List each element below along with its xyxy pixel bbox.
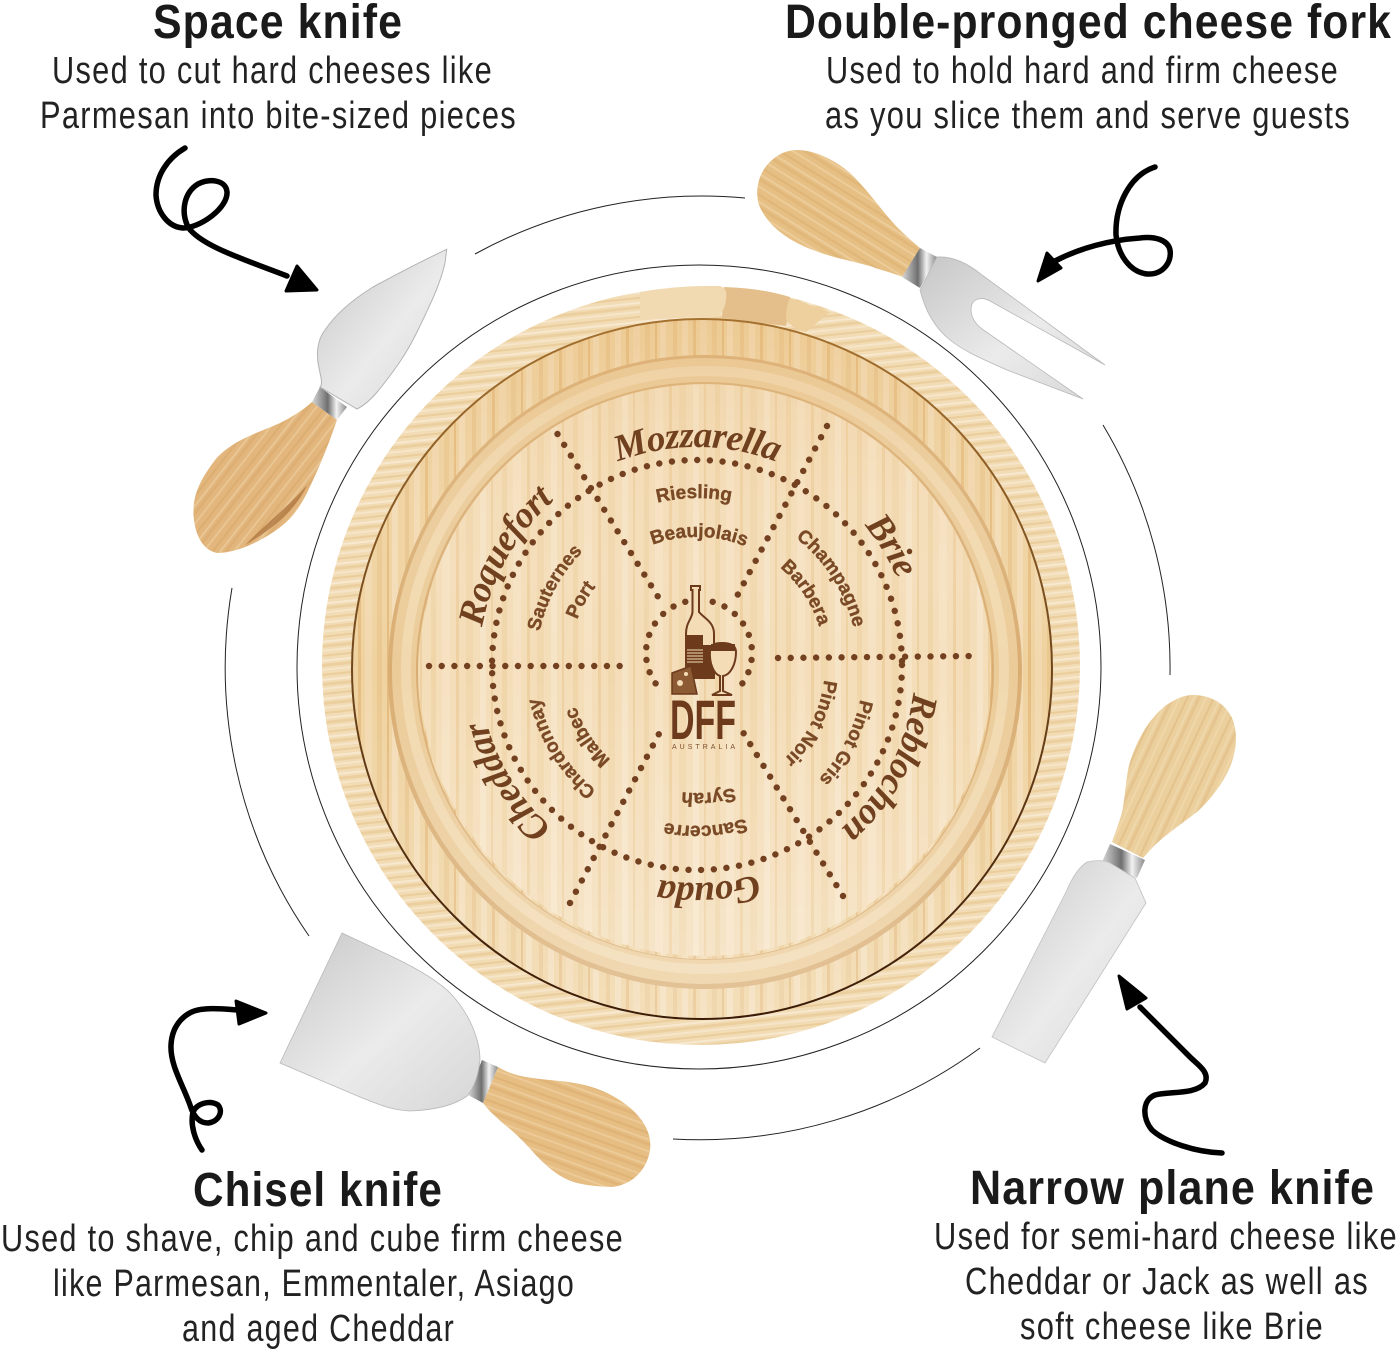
cheese names: Gouda [656, 876, 759, 908]
wine names: Sauternes [528, 546, 581, 630]
cheese names: Brie [864, 514, 912, 576]
arrow: to narrow plane knife [1119, 976, 1222, 1153]
dotted segment lines [429, 426, 972, 903]
arrow: to space knife [156, 148, 317, 291]
arrow: to chisel knife [171, 1001, 266, 1150]
arrow: to cheese fork [1038, 167, 1170, 281]
wine names: Port [565, 580, 596, 619]
wine names: Beaujolais [650, 523, 748, 546]
icon: space knife [193, 249, 447, 553]
icon: wine bottle [686, 586, 714, 678]
title: Chisel knife: Used to shave, chip and cube firm cheese [1, 1218, 624, 1260]
logo: DFF Australia [670, 586, 736, 751]
wine names: Pinot Noir [786, 680, 838, 766]
wine names: Sancerre [664, 820, 748, 836]
juice groove [403, 370, 1007, 974]
wine names: Syrah [682, 786, 736, 807]
title: Chisel knife [1, 1164, 624, 1350]
wine names: Chardonnay [529, 700, 594, 798]
icon: wine glass [710, 643, 736, 695]
DFF wordmark: DFF [670, 688, 736, 751]
wine names [528, 484, 874, 836]
icon: cheese fork [757, 150, 1105, 399]
outer circle arcs [225, 196, 1170, 1140]
icon: narrow plane knife [992, 695, 1236, 1063]
cheese names: Reblochon [842, 692, 937, 840]
panel: bamboo cheese board [322, 286, 1080, 1045]
cheese names [459, 427, 937, 908]
cheese names: Mozzarella [614, 427, 782, 462]
board rim [322, 287, 1080, 1045]
title: Chisel knife: Chisel knife [193, 1164, 443, 1217]
wine names: Champagne [798, 530, 863, 626]
title: Space knife: Used to cut hard cheeses like [52, 50, 493, 92]
logo: DFF Australia: AUSTRALIA [672, 744, 735, 751]
title: Space knife: Parmesan into bite-sized pieces [40, 95, 517, 137]
wine names: Riesling [656, 484, 732, 505]
icon: chisel knife [280, 933, 650, 1187]
board centre [419, 384, 991, 956]
icon: cheese wedge [672, 666, 697, 694]
title: Space knife [40, 0, 517, 137]
title: Chisel knife: and aged Cheddar [182, 1308, 455, 1350]
title: Narrow plane knife: soft cheese like Brie [1020, 1306, 1324, 1348]
cheese names: Roquefort [459, 486, 554, 628]
cheese names: Cheddar [470, 724, 548, 838]
knife drawer slot [640, 286, 830, 332]
wine names: Malbec [567, 708, 610, 768]
inner ring around the board [297, 265, 1101, 1069]
title: Narrow plane knife [934, 1162, 1398, 1348]
inner board [352, 319, 1052, 1019]
title: Double-pronged cheese fork [785, 0, 1392, 137]
wine names: Pinot Gris [820, 700, 874, 784]
title: Chisel knife: like Parmesan, Emmentaler, Asiago [53, 1263, 575, 1305]
wine names: Barbera [780, 558, 828, 627]
